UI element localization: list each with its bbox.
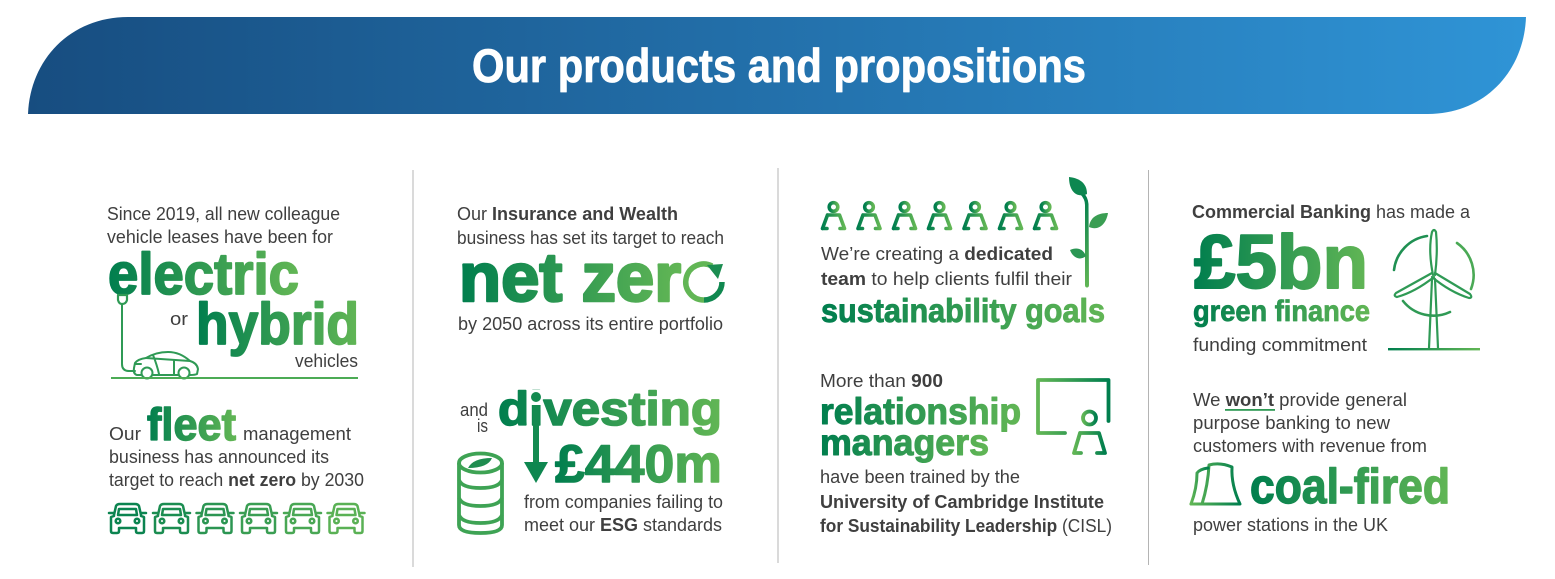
- heading: relationship managers: relationship: [820, 391, 1021, 432]
- heading: electric: electric: [108, 242, 299, 307]
- icon: row of fleet cars: [109, 504, 364, 533]
- text: our fleet management: fleet: [147, 399, 236, 450]
- text: CISL training: for Sustainability Leadership (CISL): [820, 516, 1112, 536]
- text: commercial banking: Commercial Banking has made a: [1192, 202, 1471, 222]
- heading: 440m: £440m: [555, 435, 722, 494]
- text: CISL training: University of Cambridge Institute: [820, 492, 1104, 512]
- heading: sustainability goals: sustainability goals: [821, 292, 1105, 329]
- text: colleague vehicle leases: vehicle leases have been for: [107, 227, 333, 247]
- icon: growing plant: [1069, 177, 1108, 288]
- icon: row of seven people: [822, 203, 1056, 228]
- text: vehicles: vehicles: [295, 351, 358, 371]
- icon: coin stack with leaf: [459, 454, 502, 533]
- text: CISL training: have been trained by the: [820, 467, 1020, 487]
- text: ESG standards: from companies failing to: [524, 492, 723, 512]
- icon: wind turbine: [1394, 230, 1474, 348]
- text: we won't provide: [1193, 390, 1427, 456]
- text: we won't provide: customers with revenue from: [1193, 436, 1427, 456]
- icon: circular arrow o: [686, 264, 723, 300]
- text: our fleet management: target to reach net zero by 2030: [109, 470, 364, 490]
- text: ESG standards: meet our ESG standards: [524, 515, 722, 535]
- heading: net zero: net zer: [459, 239, 681, 316]
- text: and is: and: [460, 400, 488, 420]
- title: Our products and propositions: [472, 39, 1086, 92]
- icon: presenter at board: [1038, 380, 1108, 453]
- panel: vehicles: [107, 204, 364, 533]
- text: we won't provide: We won’t provide general: [1193, 390, 1407, 410]
- text: dedicated team: We’re creating a dedicated: [821, 244, 1053, 264]
- icon: charging electric car: [118, 295, 198, 378]
- text: dedicated team: [821, 244, 1072, 289]
- text: by 2050: by 2050 across its entire portfolio: [458, 314, 723, 334]
- text: our fleet management: Our: [109, 424, 141, 444]
- heading: relationship managers: [820, 391, 1021, 463]
- text: and is: [460, 400, 488, 436]
- text: our fleet management: [109, 399, 364, 490]
- panel: commercial banking: [1191, 202, 1480, 535]
- turbine ground line: [1388, 348, 1480, 350]
- text: colleague vehicle leases: [107, 204, 340, 247]
- header banner: [28, 17, 1526, 114]
- text: ESG standards: [524, 492, 723, 535]
- heading: coal-fired: coal-fired: [1250, 460, 1450, 514]
- heading: divesting: divesting: [498, 382, 722, 435]
- text: insurance and wealth target: [457, 204, 724, 248]
- panel: sustainability team: [820, 177, 1112, 536]
- text: and is: is: [477, 416, 488, 436]
- text: more than 900: More than 900: [820, 371, 943, 391]
- text: our fleet management: business has announced its: [109, 447, 329, 467]
- ground line: [111, 377, 358, 379]
- heading: hybrid: hybrid: [196, 292, 359, 357]
- text: our fleet management: management: [243, 424, 351, 444]
- underline: [1225, 409, 1275, 411]
- text: power stations: power stations in the UK: [1193, 515, 1388, 535]
- text: dedicated team: team to help clients fulfil their: [821, 269, 1072, 289]
- icon: down arrow: [524, 390, 548, 483]
- heading: green finance: green finance: [1193, 295, 1370, 328]
- text: insurance and wealth target: Our Insurance and Wealth: [457, 204, 678, 224]
- text: or: or: [170, 309, 188, 329]
- heading: 5bn: £5bn: [1194, 220, 1368, 305]
- text: CISL training: [820, 467, 1112, 536]
- panel: insurance and wealth: [457, 204, 724, 535]
- heading: relationship managers: managers: [820, 422, 989, 463]
- icon: cooling towers: [1191, 464, 1240, 504]
- text: we won't provide: purpose banking to new: [1193, 413, 1391, 433]
- text: colleague vehicle leases: Since 2019, all new colleague: [107, 204, 340, 224]
- text: funding commitment: funding commitment: [1193, 335, 1367, 355]
- text: insurance and wealth target: business has set its target to reach: [457, 228, 724, 248]
